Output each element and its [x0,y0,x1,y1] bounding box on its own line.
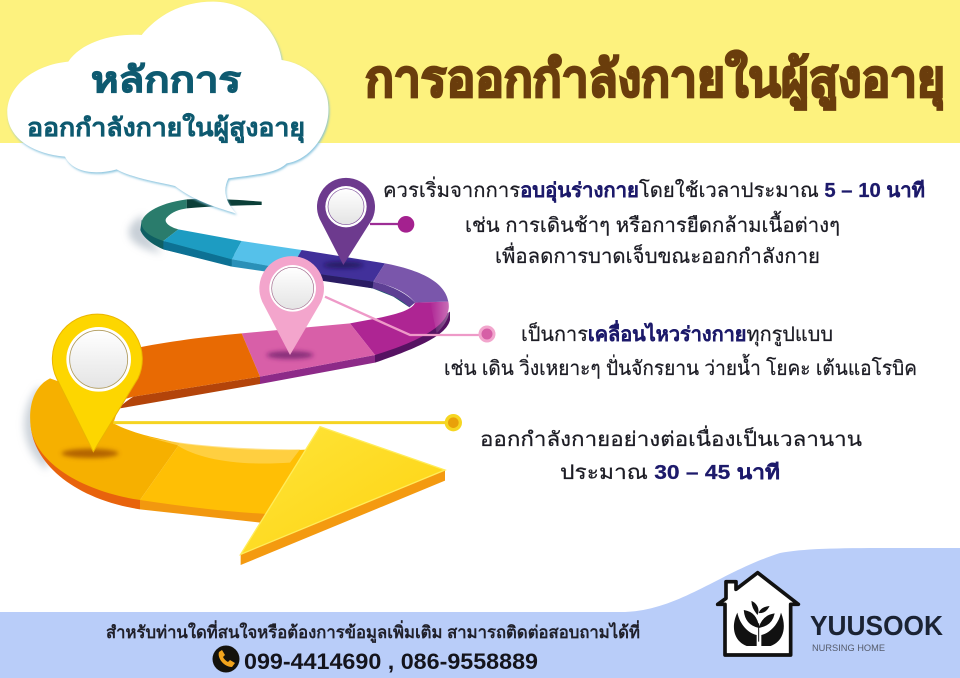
road yellow curve [30,378,180,500]
winding road with arrow [24,178,480,565]
arrow head [241,427,445,554]
road blue segment [163,229,242,259]
road orange segment [83,333,260,403]
dot pink [480,327,494,341]
road teal segment [142,199,187,241]
blue footer band with wave [0,548,960,678]
text block 2: เช่น เดิน วิ่งเหยาะๆ ปั่นจักรยาน ว่ายน้ำ โยคะ เต้นแอโรบิค [444,354,917,380]
text block 3: ออกกำลังกายอย่างต่อเนื่องเป็นเวลานาน [480,425,862,451]
connector yellow [113,414,462,431]
text block 1: ควรเริ่มจากการอบอุ่นร่างกายโดยใช้เวลาประมาณ 5 – 10 นาที [383,176,925,203]
icon: house with hands and plant [718,573,798,655]
cloud heading: หลักการ [91,59,242,100]
icon: phone [212,646,240,672]
text block 2 [444,319,917,380]
logo: Yuusook [718,573,943,655]
cloud heading [27,59,305,144]
text block 2: เป็นการเคลื่อนไหวร่างกายทุกรูปแบบ [521,319,833,347]
logo tagline: NURSING HOME [812,643,885,654]
arrow head side [241,470,445,565]
road light blue segment [232,241,302,270]
road light purple curve [373,263,448,303]
speech cloud [7,2,328,213]
cloud heading: ออกกำลังกายในผู้สูงอายุ [27,112,305,144]
phone numbers: 099-4414690 , 086-9558889 [244,649,538,674]
title: การออกกำลังกายในผู้สูงอายุ [365,50,945,110]
road pink segment [242,323,375,377]
road yellow light segment [140,443,310,514]
road end dark [187,199,262,208]
yellow header band [0,0,960,143]
logo wordmark: YUUSOOK [810,610,943,641]
pin yellow [52,314,142,452]
text block 1: เช่น การเดินช้าๆ หรือการยืดกล้ามเนื้อต่างๆ [465,211,840,237]
pin purple [317,178,375,265]
road magenta curve [350,302,449,355]
road dark purple segment [290,250,385,282]
connector purple [370,216,414,233]
road sides [140,220,415,307]
text block 1: เพื่อลดการบาดเจ็บขณะออกกำลังกาย [495,242,820,268]
text block 3: ประมาณ 30 – 45 นาที [560,461,780,484]
text block 3 [480,425,862,484]
pin pink [259,256,324,355]
connector pink [325,297,480,335]
pin shadows [62,262,363,458]
footer contact text: สำหรับท่านใดที่สนใจหรือต้องการข้อมูลเพิ่มเติม สามารถติดต่อสอบถามได้ที่ [106,620,640,644]
text block 1 [383,176,925,268]
